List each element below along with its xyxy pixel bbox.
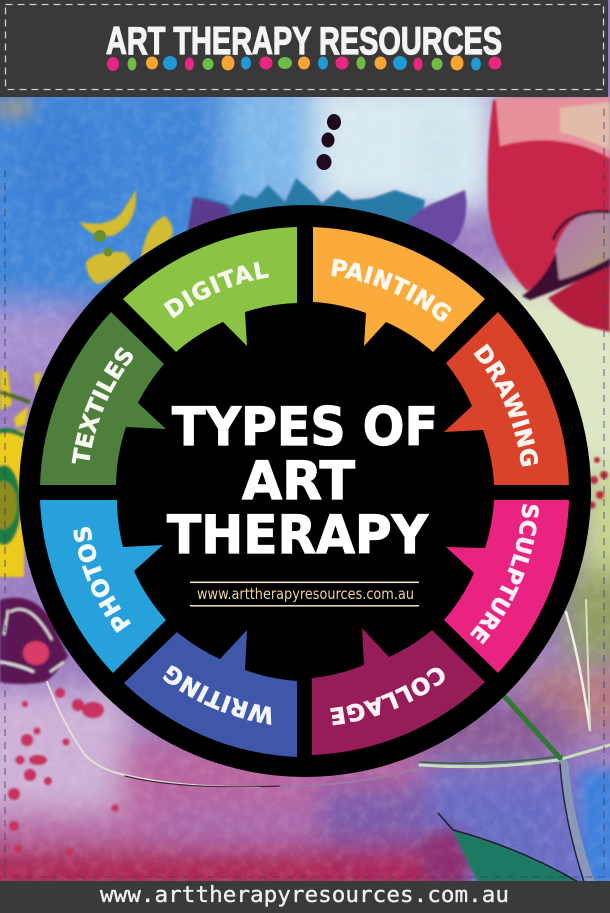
flower: pink upper petal [496,97,610,158]
label: photos: PHOTOS [74,527,131,633]
label: painting: PAINTING [331,258,452,322]
three dark dots [316,114,341,170]
footer bar [0,881,610,913]
segment: drawing [444,312,569,485]
right side red splatter [588,457,608,508]
header bar [0,0,608,97]
purple blob right [397,190,466,245]
segment: collage [312,628,485,755]
coloured dots row [107,56,502,71]
label: writing: WRITING [162,666,272,725]
purple blob left [187,197,243,235]
flower: crimson petal [488,97,610,332]
left yellow green motif [0,368,42,577]
website text: www.arttherapyresources.com.au [197,585,414,603]
label: digital: DIGITAL [164,262,270,318]
green beads [94,230,112,256]
blue splash [188,178,425,232]
footer website text: www.arttherapyresources.com.au [100,882,509,908]
flower: purple inner petal [553,210,610,282]
yellow leaves [80,190,173,284]
wheel disc [19,205,591,777]
flower: dark sepal [522,252,610,300]
wheel [19,205,591,777]
title line 1: TYPES OF [172,397,438,458]
dark purple flower [0,598,68,684]
segment: digital [123,227,297,352]
segment: sculpture [444,500,569,673]
flower: lower red petal [548,262,610,332]
segment: painting [313,227,485,352]
segment: writing [124,630,297,757]
segment: textiles [40,312,166,485]
segment: photos [40,500,166,673]
label: drawing: DRAWING [474,344,538,466]
flower: dark arc [553,212,610,240]
stems [47,600,610,882]
flower: cream highlight [560,102,610,150]
centre title [167,397,438,566]
label: collage: COLLAGE [330,668,445,726]
stitched border [6,4,604,90]
label: textiles: TEXTILES [72,347,133,464]
teal leaf [438,813,578,882]
title line 3: THERAPY [167,505,429,566]
red paint spots [8,688,118,856]
title line 2: ART [242,451,355,512]
label: sculpture: SCULPTURE [470,504,539,644]
